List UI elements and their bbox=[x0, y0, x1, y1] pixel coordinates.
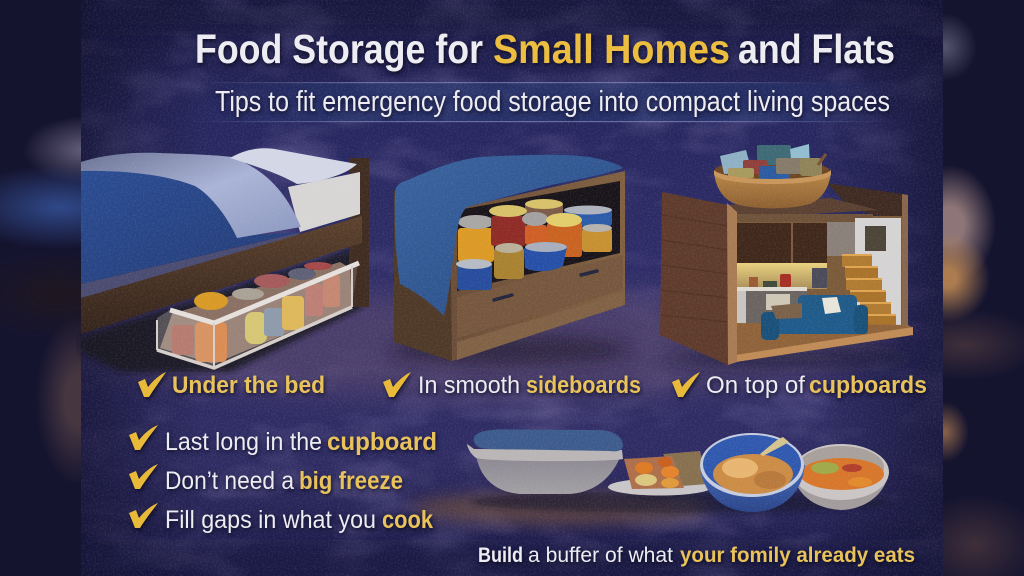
interior back wall bbox=[737, 216, 902, 326]
upper cabinets bbox=[737, 223, 827, 264]
side panel bbox=[394, 190, 452, 361]
bread slice bbox=[663, 451, 708, 486]
brick side wall bbox=[660, 192, 728, 365]
label: in smooth sideboards: sideboards bbox=[526, 372, 641, 399]
mattress bbox=[288, 172, 360, 232]
sofa bbox=[761, 295, 868, 340]
illustration: bowls of food bbox=[467, 429, 890, 513]
blue bowl with pasta bbox=[700, 433, 805, 512]
basket contents bbox=[720, 144, 826, 179]
table shadow bbox=[470, 491, 890, 513]
illustration: basket on top of cupboard and cutaway room bbox=[660, 144, 915, 368]
benefit: last long: Last long in the bbox=[165, 428, 322, 456]
wicker basket bbox=[714, 171, 831, 208]
title: Food Storage for bbox=[195, 26, 483, 72]
storage box shell bbox=[157, 310, 214, 368]
window bbox=[865, 226, 886, 251]
shelf opening bbox=[457, 181, 620, 291]
label: in smooth sideboards bbox=[383, 372, 641, 399]
back upper wall bbox=[827, 183, 908, 222]
benefit list bbox=[129, 425, 437, 534]
label: on top of cupboards bbox=[672, 372, 927, 399]
grey edge under blanket bbox=[81, 232, 302, 298]
benefit: big freeze: big freeze bbox=[299, 467, 403, 495]
sideboard shadow bbox=[390, 334, 630, 366]
right bowl with stew bbox=[793, 444, 889, 510]
label: in smooth sideboards: In smooth bbox=[418, 372, 520, 399]
label: on top of cupboards: cupboards bbox=[809, 372, 927, 399]
benefit: fill gaps: cook bbox=[382, 506, 433, 534]
footer tagline bbox=[478, 544, 915, 567]
cupboard top surface bbox=[728, 198, 878, 218]
right column bbox=[902, 194, 908, 326]
floor bbox=[736, 323, 913, 356]
cans and jars bbox=[456, 199, 612, 290]
benefit: big freeze: Don’t need a bbox=[165, 467, 294, 495]
lit kitchen wall bbox=[737, 263, 827, 289]
check icon bbox=[138, 372, 166, 397]
counter and lower cabinets bbox=[737, 287, 807, 291]
shadow under bed bbox=[81, 245, 362, 372]
left corner column bbox=[727, 203, 737, 365]
blue blanket bbox=[81, 170, 300, 284]
check icon bbox=[383, 372, 411, 397]
title: and Flats bbox=[738, 26, 895, 72]
plate bbox=[608, 478, 712, 496]
label: on top of cupboards: On top of bbox=[706, 372, 805, 399]
sheet bbox=[81, 153, 301, 238]
check icon bbox=[672, 372, 700, 397]
title bbox=[195, 26, 895, 72]
tray with orange food bbox=[624, 456, 684, 489]
draped towel bbox=[395, 155, 623, 316]
storage box contents bbox=[160, 262, 352, 364]
shelf alcove bbox=[827, 222, 855, 256]
side rail bbox=[81, 216, 362, 334]
spoon bbox=[760, 437, 789, 456]
white wall bbox=[855, 218, 901, 326]
footer tagline: your fomily already eats bbox=[680, 544, 915, 567]
footer tagline: a buffer of what bbox=[528, 544, 673, 567]
staircase bbox=[842, 254, 896, 326]
benefit: fill gaps bbox=[129, 503, 433, 534]
benefit: last long bbox=[129, 425, 437, 456]
small kitchen items bbox=[749, 268, 827, 288]
benefit: last long: cupboard bbox=[327, 428, 437, 456]
bed post bbox=[349, 158, 369, 307]
basket rim back bbox=[714, 160, 830, 182]
front frame bbox=[450, 171, 625, 361]
benefit: big freeze bbox=[129, 464, 403, 495]
lidded stone bowl bbox=[467, 429, 623, 494]
upper drawer bbox=[457, 255, 623, 338]
title: Small Homes bbox=[493, 26, 730, 72]
illustration: storage box under the bed bbox=[81, 148, 369, 372]
subtitle: Tips to fit emergency food storage into compact living spaces bbox=[215, 86, 890, 118]
footer tagline: Build bbox=[478, 544, 523, 567]
room shadow bbox=[665, 348, 915, 368]
lower drawer bbox=[457, 293, 623, 360]
benefit: fill gaps: Fill gaps in what you bbox=[165, 506, 376, 534]
pillow bbox=[230, 148, 357, 184]
header band between rules bbox=[190, 82, 900, 122]
label: under the bed: Under the bed bbox=[172, 372, 325, 399]
drawer handles bbox=[494, 271, 597, 300]
illustration: sideboard with jars bbox=[390, 155, 630, 366]
